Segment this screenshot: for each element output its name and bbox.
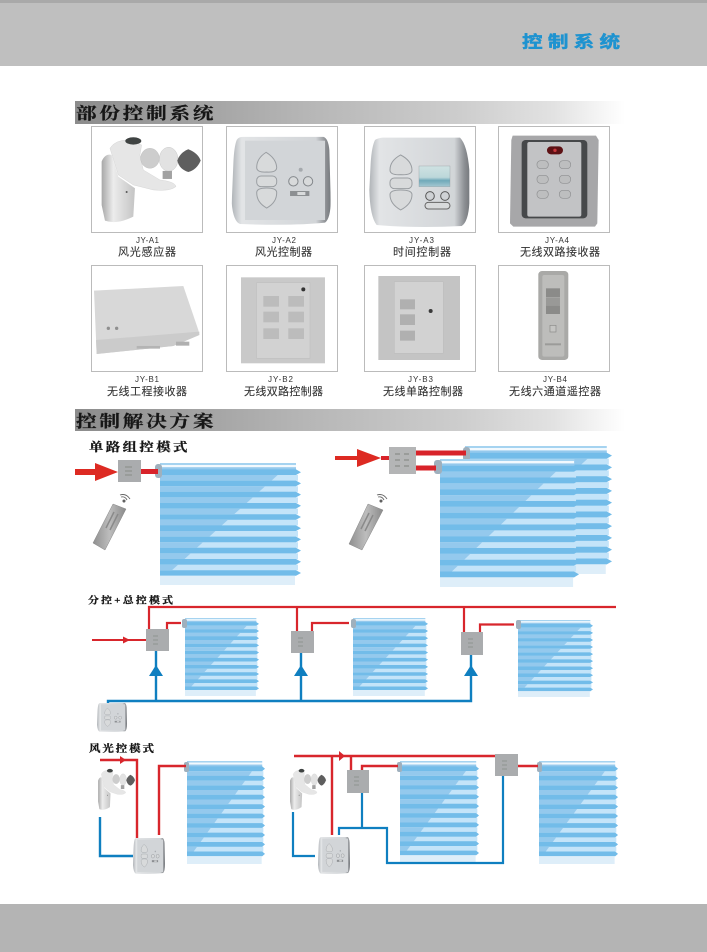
subheading: 单路组控模式: 单路组控模式 [89, 439, 187, 454]
remote control [93, 504, 126, 550]
red input arrow [75, 463, 118, 481]
blind [155, 463, 301, 585]
icon: engineering receiver box [94, 286, 199, 354]
blind [184, 761, 265, 864]
icon: timer controller [369, 138, 469, 227]
blue signal lines [108, 651, 471, 704]
icon: wireless dual receiver [510, 136, 599, 227]
remote control [349, 504, 383, 550]
red lines [100, 760, 186, 838]
section heading: 部份控制系统 [75, 101, 625, 124]
footer band [0, 904, 707, 952]
product card: JY-B2 [226, 266, 338, 398]
blue line [100, 817, 133, 856]
product card: JY-B1: 无线工程接收器 [107, 384, 187, 398]
controller [133, 838, 165, 874]
product card: JY-B3 [364, 266, 476, 398]
blind 1 [397, 761, 479, 863]
product card: JY-A4: JY-A4 [545, 236, 570, 245]
control boxes [347, 754, 518, 793]
back blind [463, 446, 612, 574]
product card: JY-B2: JY-B2 [268, 375, 294, 384]
blind 3 [516, 620, 593, 697]
product card: JY-A2 [226, 126, 338, 258]
diagram: wind light control double [290, 751, 618, 874]
product card: JY-A1: JY-A1 [136, 236, 160, 245]
red lines [294, 756, 538, 835]
product card: JY-A3: JY-A3 [409, 236, 435, 245]
red output lines [416, 453, 466, 468]
product card: JY-B4: 无线六通道遥控器 [509, 384, 601, 398]
product card: JY-B4: JY-B4 [543, 375, 568, 384]
product card: JY-A2: JY-A2 [272, 236, 297, 245]
section heading: 控制解决方案 [75, 409, 625, 431]
master controller [97, 703, 127, 732]
control box [118, 460, 141, 482]
icon: wind light controller [232, 137, 331, 225]
blue arrows [149, 665, 478, 676]
diagram: wind light control single [98, 756, 265, 874]
red output line [141, 469, 158, 474]
red input line [92, 636, 146, 644]
product card: JY-A1: 风光感应器 [118, 244, 176, 258]
sensor [98, 769, 135, 810]
product card: JY-A3: 时间控制器 [393, 244, 451, 258]
header band [0, 0, 707, 66]
product card: JY-B1: JY-B1 [135, 375, 160, 384]
product card: JY-A1 [92, 126, 202, 258]
red input arrow [335, 449, 381, 467]
product card: JY-B3: 无线单路控制器 [383, 384, 463, 398]
section heading: 部份控制系统: 部份控制系统 [76, 104, 215, 123]
diagram: double blind group control [335, 446, 612, 587]
product card: JY-B2: 无线双路控制器 [244, 384, 323, 398]
icon: wireless single controller [378, 276, 460, 360]
diagram: single blind group control [75, 460, 301, 585]
blind 1 [182, 618, 259, 696]
product card: JY-A2: 风光控制器 [255, 244, 312, 258]
diagram: individual plus master control [92, 607, 616, 732]
sensor [290, 769, 326, 810]
blind 2 [351, 618, 428, 696]
control boxes [146, 629, 483, 655]
red power lines [149, 607, 616, 632]
blind 2 [537, 761, 618, 864]
icon: wireless dual controller [241, 277, 325, 363]
product card: JY-A3 [364, 126, 476, 258]
icon: wireless signal [120, 494, 130, 502]
icon: wireless signal [377, 494, 387, 502]
subheading: 分控+总控模式: 分控+总控模式 [88, 594, 173, 606]
product card: JY-B4 [498, 266, 610, 398]
header title: 控制系统 [522, 32, 621, 51]
front blind [434, 459, 579, 587]
red arrow [339, 751, 345, 761]
red arrow [120, 756, 126, 764]
product card: JY-A4: 无线双路接收器 [520, 244, 600, 258]
subheading: 风光控模式: 风光控模式 [89, 743, 154, 755]
blue lines [293, 776, 503, 863]
section heading: 控制解决方案: 控制解决方案 [76, 412, 214, 431]
icon: wind light sensor [102, 137, 201, 222]
product card: JY-A4 [498, 126, 610, 258]
product card: JY-B3: JY-B3 [408, 375, 434, 384]
controller [318, 837, 350, 874]
product card: JY-B1 [92, 266, 202, 398]
control box [389, 447, 416, 474]
icon: six channel remote [538, 271, 568, 360]
